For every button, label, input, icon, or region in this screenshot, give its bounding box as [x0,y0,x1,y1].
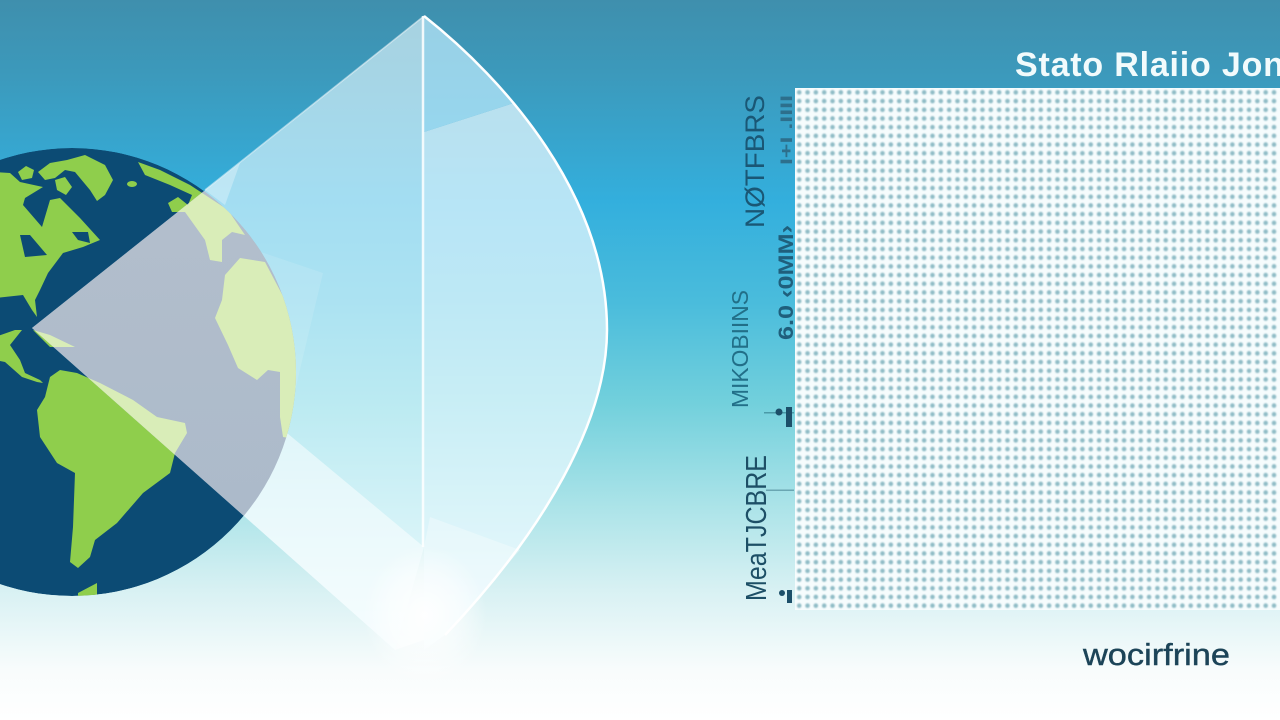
y-axis label: middle: MIKOBIINS [727,290,753,408]
prism outlines [424,16,607,635]
x-axis label: wocirfrine [1082,637,1230,672]
continents [0,155,300,600]
prism right facet [424,16,607,650]
dot matrix chart [795,88,1280,610]
prism left facet [32,16,424,650]
y-axis label: top: NØTFBRS [740,95,770,228]
prism soft highlight near globe top [205,163,240,205]
translucent prism [32,16,607,685]
apex glow [363,545,487,685]
y-axis tick: middle [764,407,794,427]
lakes [20,232,90,257]
title: Stato Rlaiio Jon [1015,46,1280,84]
globe under prism [32,191,296,516]
y-axis tick: bottom [779,590,792,603]
prism light band [243,433,424,650]
prism soft highlight near globe right [255,250,323,433]
y-axis tick value: top: I+I .IIII [777,95,796,165]
y-axis tick value: upper: 6.0 ‹0MM› [775,225,798,340]
prism top right facet [424,16,514,132]
globe [0,148,300,600]
y-axis tick: lower [766,490,794,491]
y-axis label: bottom: MeaTJCBRE [741,455,773,601]
prism lower right light [424,517,520,650]
